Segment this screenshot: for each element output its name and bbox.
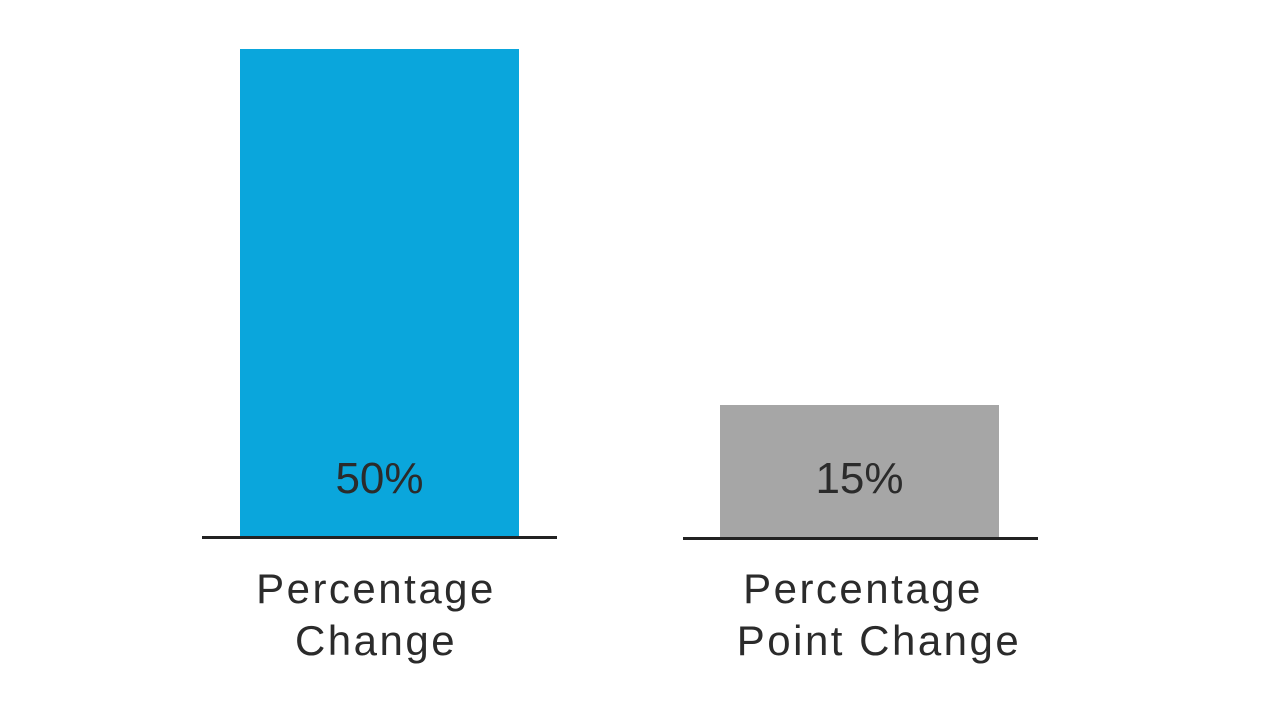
value label 50%: 50% bbox=[335, 454, 424, 503]
chart: percentage point change bar bbox=[683, 405, 1038, 540]
bar: gray 15% bbox=[720, 405, 999, 539]
label: Percentage Point Change: Percentage bbox=[743, 565, 983, 612]
label: Percentage Change: Percentage bbox=[256, 565, 496, 612]
chart: percentage change bar bbox=[202, 49, 557, 539]
value label 15%: 15% bbox=[815, 454, 904, 503]
label: Percentage Change bbox=[256, 565, 496, 664]
bar: blue 50% bbox=[240, 49, 519, 538]
label: Percentage Change: Change bbox=[295, 617, 457, 664]
label: Percentage Point Change: Point Change bbox=[737, 617, 1021, 664]
baseline left bbox=[202, 536, 557, 539]
baseline right bbox=[683, 537, 1038, 540]
label: Percentage Point Change bbox=[737, 565, 1021, 664]
